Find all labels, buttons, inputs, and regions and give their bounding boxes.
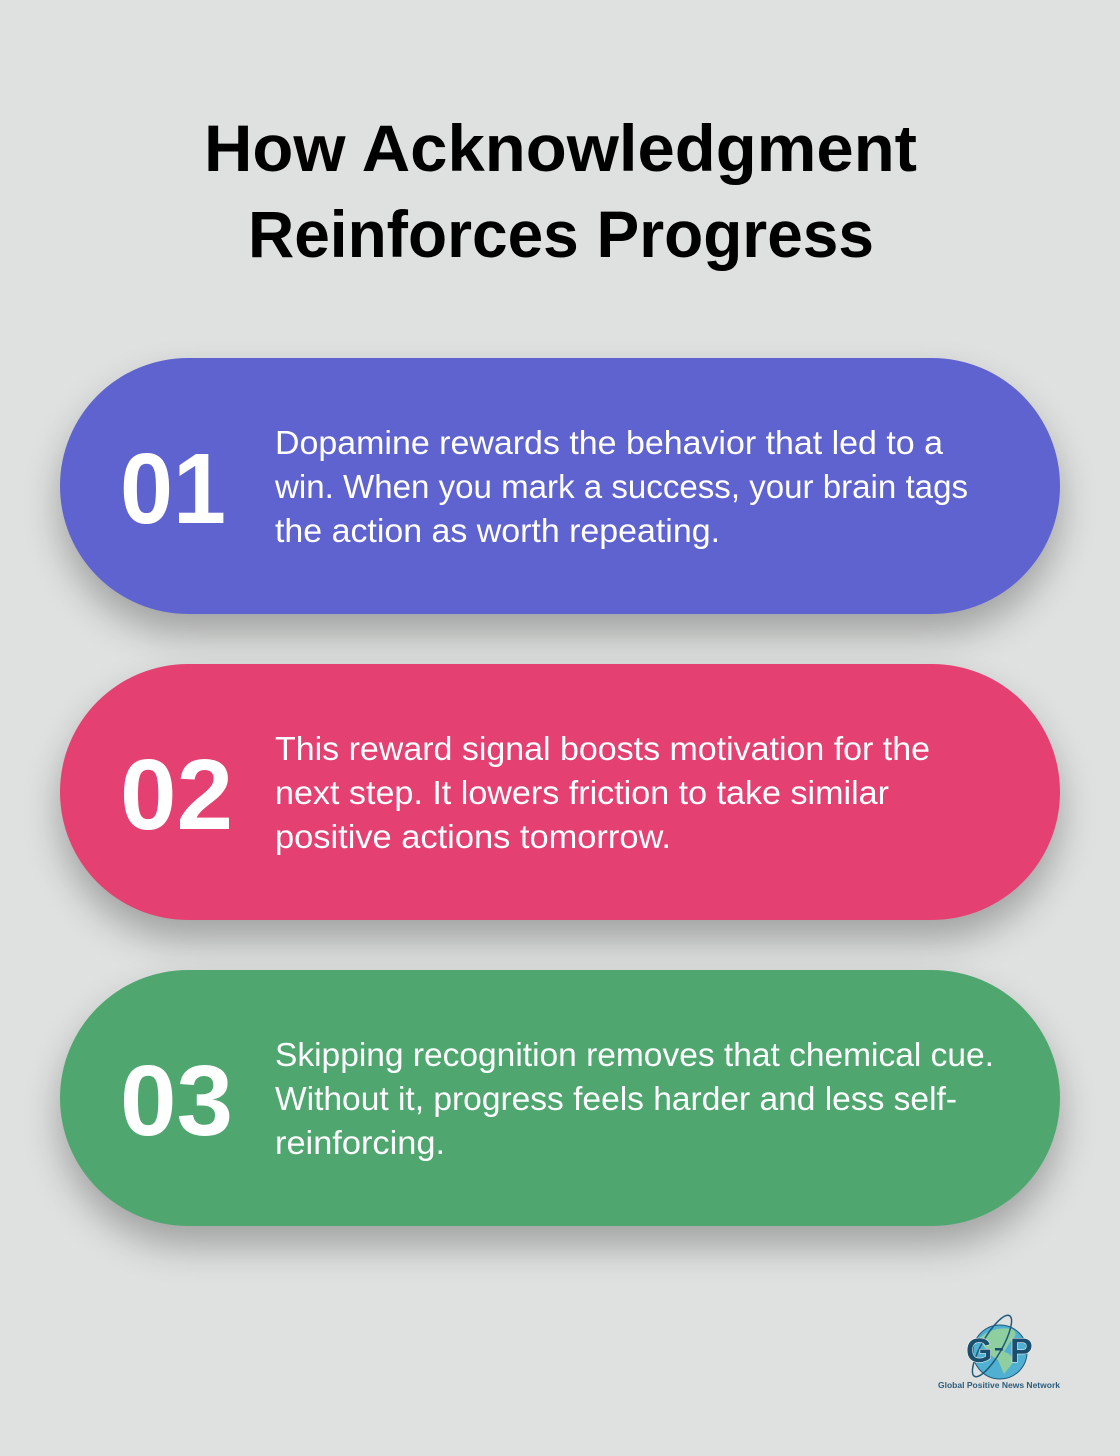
title xyxy=(204,111,917,271)
panel: step 03 xyxy=(60,970,1060,1226)
text: step 03 description: Skipping recognition removes that chemical cue. xyxy=(275,1036,994,1073)
icon: globe: G xyxy=(966,1332,992,1370)
text: step 03 description: reinforcing. xyxy=(275,1124,445,1161)
logo: Global Positive News Network xyxy=(938,1314,1060,1390)
text: step 02 description: next step. It lowers friction to take similar xyxy=(275,774,889,811)
text: step 01 description xyxy=(274,424,968,549)
number 01: 01 xyxy=(120,433,226,545)
text: step 03 description xyxy=(275,1036,994,1161)
number 03: 03 xyxy=(120,1045,233,1157)
panel: step 02 xyxy=(60,664,1060,920)
text: step 01 description: the action as worth repeating. xyxy=(275,512,720,549)
number 02: 02 xyxy=(120,739,233,851)
text: step 02 description: This reward signal boosts motivation for the xyxy=(275,730,930,767)
text: step 03 description: Without it, progress feels harder and less self- xyxy=(275,1080,957,1117)
text: step 02 description xyxy=(275,730,930,855)
logo wordmark: Global Positive News Network xyxy=(938,1380,1060,1390)
text: step 01 description: Dopamine rewards the behavior that led to a xyxy=(275,424,944,461)
icon: globe: P xyxy=(1010,1332,1033,1370)
icon: globe xyxy=(966,1311,1033,1381)
title: Reinforces Progress xyxy=(248,197,874,271)
panel: step 01 xyxy=(60,358,1060,614)
title: How Acknowledgment xyxy=(204,111,917,185)
text: step 02 description: positive actions tomorrow. xyxy=(275,818,671,855)
text: step 01 description: win. When you mark a success, your brain tags xyxy=(274,468,968,505)
